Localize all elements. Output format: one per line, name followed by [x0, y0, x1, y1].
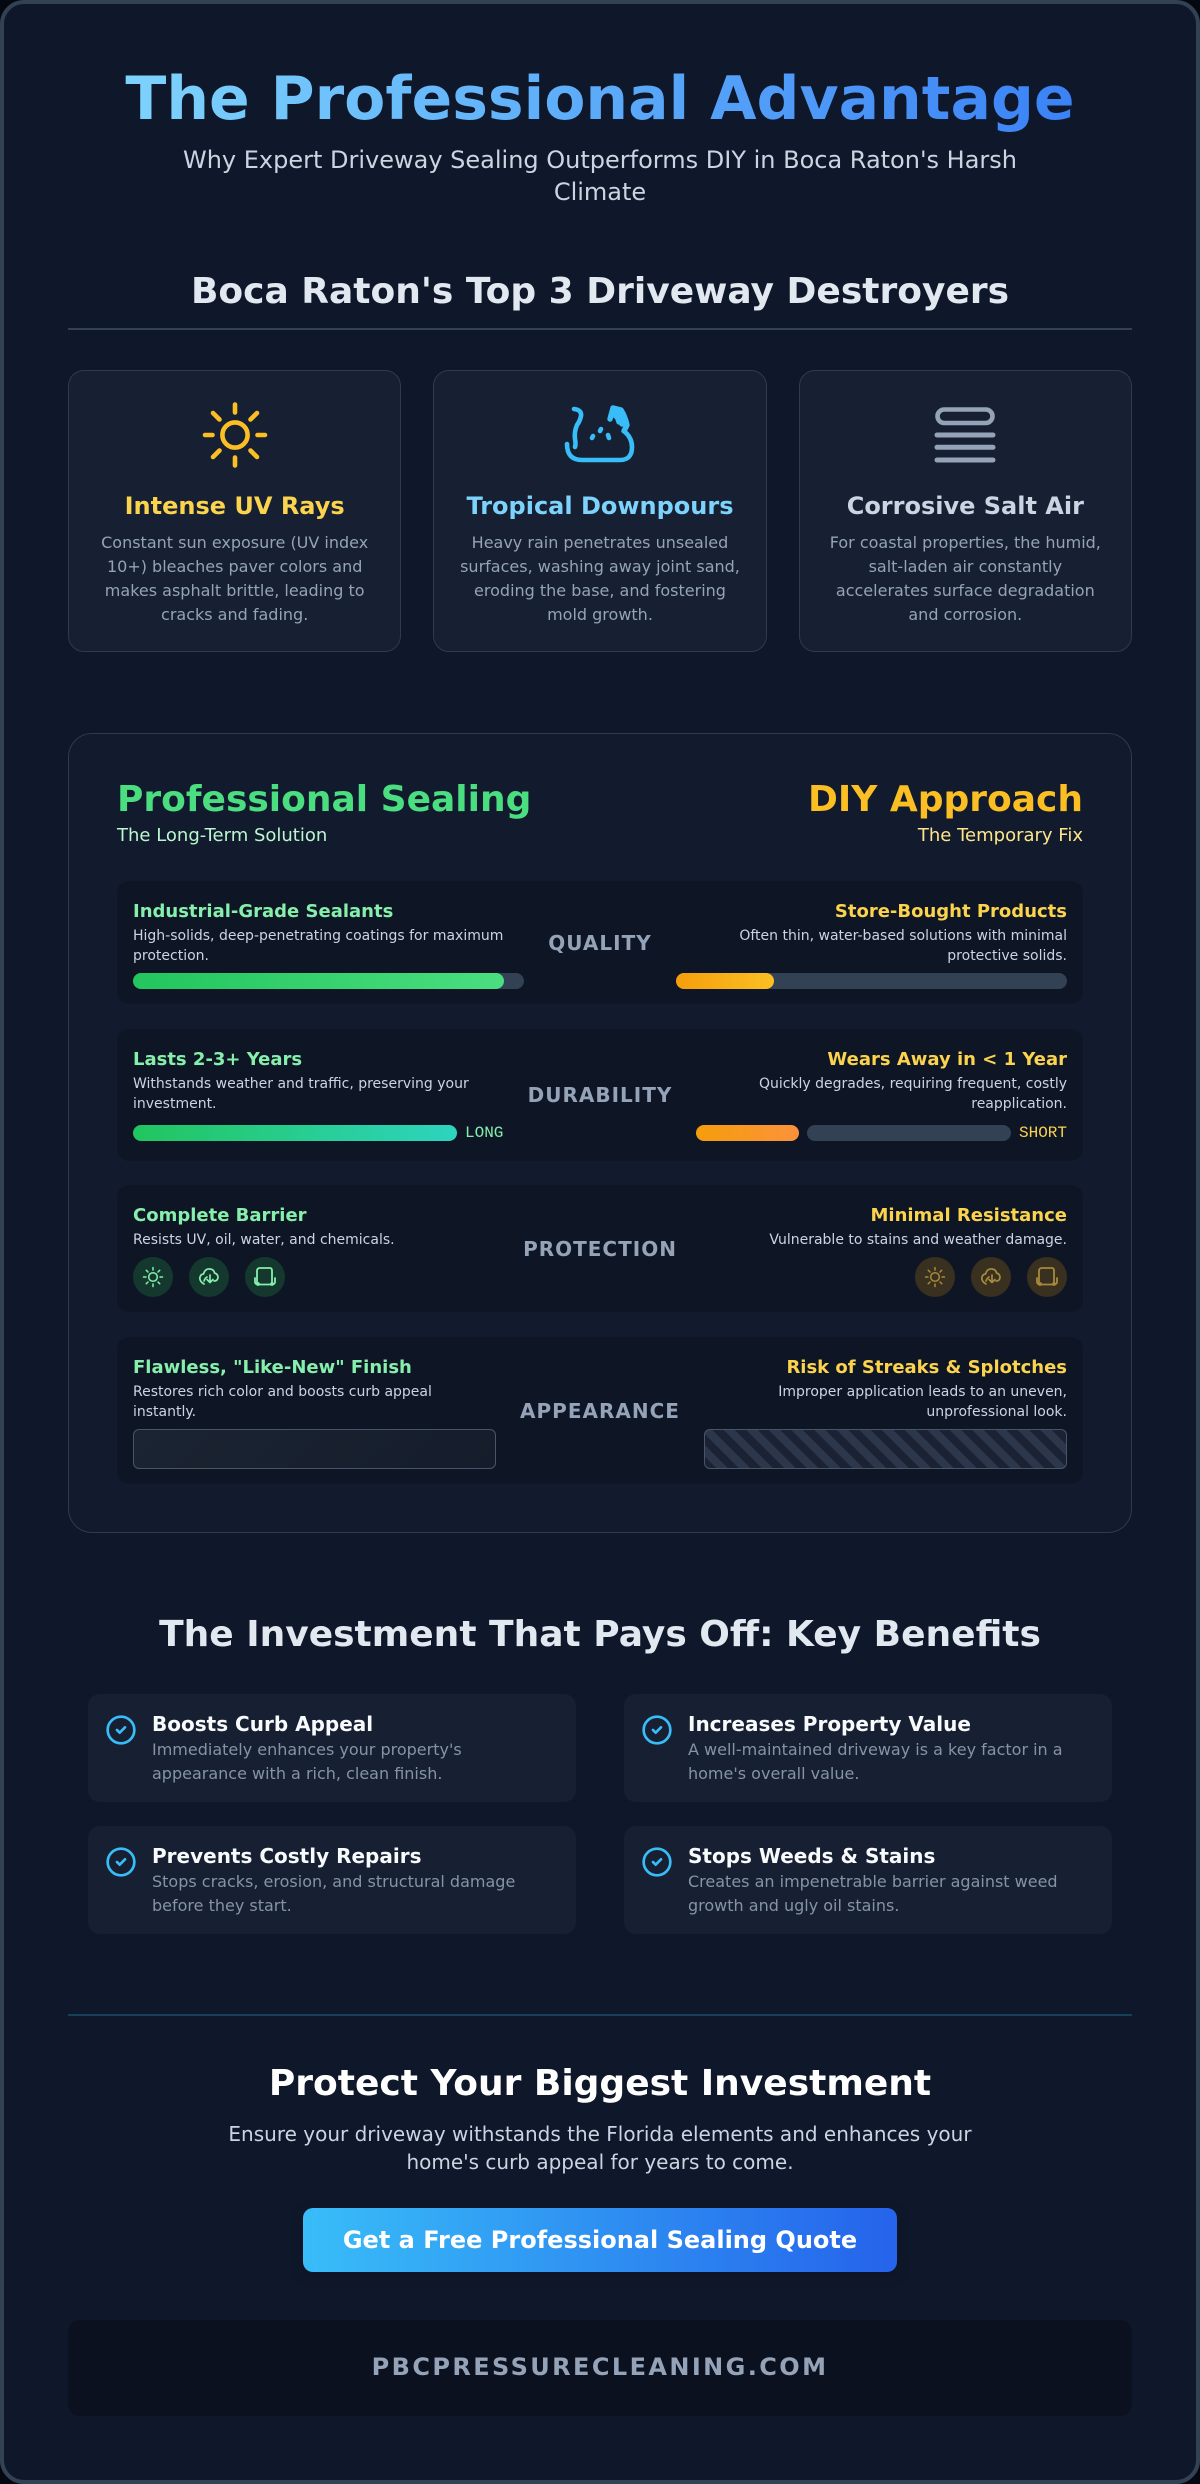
- label: appearance: APPEARANCE: [520, 1399, 680, 1423]
- icon: weak chemical resistance: [1027, 1257, 1067, 1297]
- professional quality bar: [133, 973, 524, 989]
- benefit text: [688, 1740, 1063, 1783]
- card text: salt-laden air constantly: [869, 557, 1062, 576]
- benefit title: Stops Weeds & Stains: [688, 1844, 935, 1868]
- DIY protection text: Vulnerable to stains and weather damage.: [769, 1232, 1067, 1248]
- icon: salt air lines: [934, 407, 996, 462]
- panel: corrosive salt air: [799, 370, 1132, 652]
- benefit text: [152, 1740, 462, 1783]
- panel: intense UV rays: [68, 370, 401, 652]
- icon: rain cloud: [564, 405, 634, 462]
- panel: comparison professional vs DIY: [68, 733, 1132, 1533]
- DIY durability text: reapplication.: [971, 1096, 1067, 1112]
- DIY quality bar: [676, 973, 1067, 989]
- benefit title: Prevents Costly Repairs: [152, 1844, 422, 1868]
- DIY quality text: Often thin, water-based solutions with minimal: [739, 928, 1067, 944]
- icon: sun: [202, 402, 268, 468]
- professional appearance title: Flawless, "Like-New" Finish: [133, 1357, 412, 1378]
- call to action text: [228, 2122, 972, 2174]
- DIY appearance text: Improper application leads to an uneven,: [778, 1384, 1067, 1400]
- benefit text: home's overall value.: [688, 1764, 859, 1783]
- icon: check: [642, 1847, 672, 1877]
- professional quality title: Industrial-Grade Sealants: [133, 901, 393, 922]
- card text: and corrosion.: [908, 605, 1022, 624]
- icon: oil and water resistance: [189, 1257, 229, 1297]
- professional durability bar: [133, 1125, 457, 1141]
- professional durability text: Withstands weather and traffic, preserving your: [133, 1076, 469, 1092]
- card title: Intense UV Rays: [125, 492, 345, 520]
- card text: surfaces, washing away joint sand,: [460, 557, 740, 576]
- DIY durability remainder: [807, 1125, 1011, 1141]
- icon: check: [642, 1715, 672, 1745]
- title: The Professional Advantage: [125, 64, 1075, 134]
- card text: [460, 533, 740, 624]
- card text: Heavy rain penetrates unsealed: [472, 533, 728, 552]
- benefit text: Creates an impenetrable barrier against weed: [688, 1872, 1058, 1891]
- card text: 10+) bleaches paver colors and: [107, 557, 362, 576]
- heading: call to action: Protect Your Biggest Investment: [269, 2063, 931, 2104]
- professional durability text: investment.: [133, 1096, 217, 1112]
- benefit: property value: [624, 1694, 1112, 1802]
- footer: website: [68, 2320, 1132, 2416]
- professional durability text: [133, 1076, 469, 1112]
- DIY protection title: Minimal Resistance: [870, 1205, 1067, 1226]
- card text: accelerates surface degradation: [836, 581, 1095, 600]
- DIY durability bar: [696, 1125, 799, 1141]
- button: get a quote: [303, 2208, 897, 2272]
- row: quality: [117, 881, 1083, 1004]
- professional appearance text: Restores rich color and boosts curb appeal: [133, 1384, 432, 1400]
- benefit text: [152, 1872, 515, 1915]
- card text: For coastal properties, the humid,: [830, 533, 1101, 552]
- label: durability: DURABILITY: [528, 1083, 672, 1107]
- icon: weak UV resistance: [915, 1257, 955, 1297]
- benefit text: [688, 1872, 1058, 1915]
- professional protection title: Complete Barrier: [133, 1205, 307, 1226]
- benefit: curb appeal: [88, 1694, 576, 1802]
- benefit title: Boosts Curb Appeal: [152, 1712, 373, 1736]
- benefit text: Immediately enhances your property's: [152, 1740, 462, 1759]
- professional appearance text: [133, 1384, 432, 1420]
- footer: website: PBCPRESSURECLEANING.COM: [372, 2353, 828, 2381]
- DIY quality text: [739, 928, 1067, 964]
- card text: [101, 533, 368, 624]
- button: get a quote: Get a Free Professional Sealing Quote: [343, 2226, 857, 2254]
- card text: [830, 533, 1101, 624]
- call to action text: Ensure your driveway withstands the Florida elements and enhances your: [228, 2122, 972, 2146]
- professional quality text: High-solids, deep-penetrating coatings for maximum: [133, 928, 503, 944]
- subtitle: [183, 146, 1017, 206]
- benefit text: appearance with a rich, clean finish.: [152, 1764, 442, 1783]
- card text: Constant sun exposure (UV index: [101, 533, 368, 552]
- smooth finish swatch: [133, 1429, 496, 1469]
- subtitle: Why Expert Driveway Sealing Outperforms DIY in Boca Raton's Harsh: [183, 146, 1017, 174]
- sub-heading: long-term: The Long-Term Solution: [117, 825, 327, 846]
- professional protection text: Resists UV, oil, water, and chemicals.: [133, 1232, 395, 1248]
- DIY appearance title: Risk of Streaks & Splotches: [786, 1357, 1067, 1378]
- long label: LONG: [465, 1124, 503, 1142]
- benefit text: A well-maintained driveway is a key factor in a: [688, 1740, 1063, 1759]
- professional appearance text: instantly.: [133, 1404, 196, 1420]
- card text: cracks and fading.: [161, 605, 308, 624]
- DIY quality text: protective solids.: [947, 948, 1067, 964]
- benefit text: before they start.: [152, 1896, 292, 1915]
- label: quality: QUALITY: [548, 931, 652, 955]
- benefit title: Increases Property Value: [688, 1712, 971, 1736]
- icon: weak oil and water resistance: [971, 1257, 1011, 1297]
- professional quality text: [133, 928, 503, 964]
- professional durability title: Lasts 2-3+ Years: [133, 1049, 302, 1070]
- card text: mold growth.: [547, 605, 653, 624]
- icon: check: [106, 1715, 136, 1745]
- DIY durability text: Quickly degrades, requiring frequent, costly: [759, 1076, 1067, 1092]
- row: protection: [117, 1185, 1083, 1312]
- sub-heading: temporary fix: The Temporary Fix: [918, 825, 1083, 846]
- DIY appearance text: [778, 1384, 1067, 1420]
- benefit: weeds and stains: [624, 1826, 1112, 1934]
- streaky finish swatch: [704, 1429, 1067, 1469]
- call to action text: home's curb appeal for years to come.: [406, 2150, 794, 2174]
- row: appearance: [117, 1337, 1083, 1484]
- heading: key benefits: The Investment That Pays Off: Key Benefits: [159, 1614, 1041, 1655]
- DIY appearance text: unprofessional look.: [926, 1404, 1067, 1420]
- subtitle: Climate: [554, 178, 646, 206]
- professional quality text: protection.: [133, 948, 209, 964]
- benefit text: Stops cracks, erosion, and structural damage: [152, 1872, 515, 1891]
- benefit text: growth and ugly oil stains.: [688, 1896, 899, 1915]
- icon: check: [106, 1847, 136, 1877]
- DIY quality title: Store-Bought Products: [835, 901, 1067, 922]
- heading: DIY approach: DIY Approach: [808, 779, 1083, 820]
- label: protection: PROTECTION: [523, 1237, 677, 1261]
- heading: driveway destroyers: Boca Raton's Top 3 Driveway Destroyers: [191, 271, 1009, 312]
- card title: Corrosive Salt Air: [847, 492, 1084, 520]
- panel: tropical downpours: [433, 370, 767, 652]
- benefit: prevents repairs: [88, 1826, 576, 1934]
- row: durability: [117, 1029, 1083, 1161]
- short label: SHORT: [1019, 1124, 1067, 1142]
- icon: UV resistance: [133, 1257, 173, 1297]
- card title: Tropical Downpours: [466, 492, 734, 520]
- card text: makes asphalt brittle, leading to: [105, 581, 365, 600]
- DIY durability text: [759, 1076, 1067, 1112]
- card text: eroding the base, and fostering: [474, 581, 726, 600]
- heading: professional sealing: Professional Sealing: [117, 779, 531, 820]
- icon: chemical resistance: [245, 1257, 285, 1297]
- DIY durability title: Wears Away in < 1 Year: [827, 1049, 1067, 1070]
